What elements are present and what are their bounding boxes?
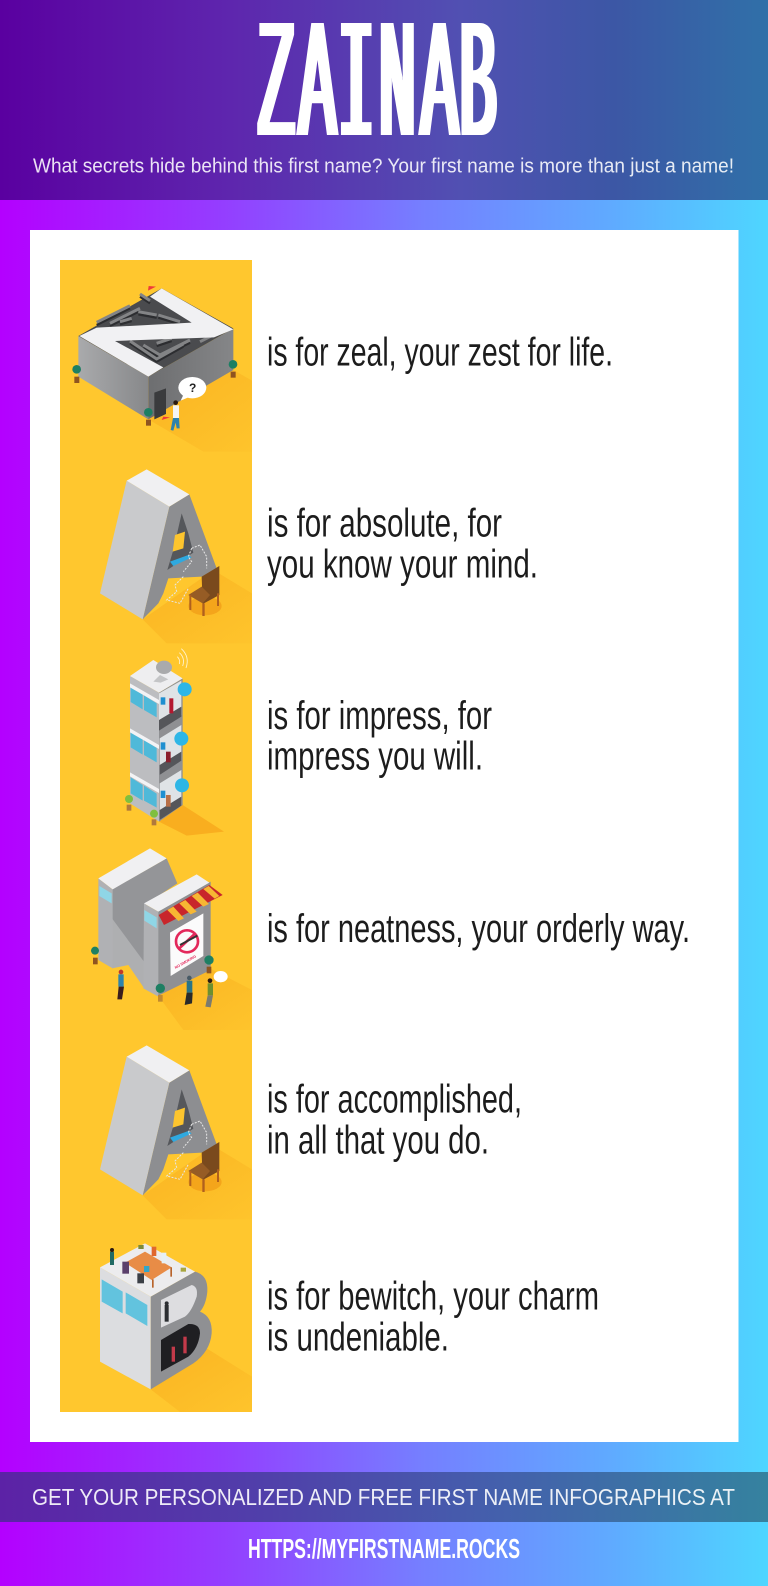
text: A line xyxy=(267,502,538,586)
title: ZAINAB xyxy=(258,0,496,187)
rooftop people xyxy=(110,1245,186,1283)
text: I line xyxy=(267,694,492,778)
speech bubble: ? xyxy=(189,381,196,395)
subtitle: What secrets hide behind this first name? Your first name is more than just a name! xyxy=(33,156,734,178)
illustration: B rooftop building xyxy=(100,1243,252,1412)
text: B line: is undeniable. xyxy=(267,1316,449,1360)
text: B line xyxy=(267,1274,599,1360)
main white panel xyxy=(30,230,738,1442)
footer band xyxy=(0,1472,768,1522)
text: A line: is for absolute, for xyxy=(267,502,502,546)
text: Z line: is for zeal, your zest for life. xyxy=(267,330,613,374)
person xyxy=(171,400,180,431)
text: A line: you know your mind. xyxy=(267,542,538,586)
text: I line: is for impress, for xyxy=(267,694,492,738)
illustration: I office tower xyxy=(125,649,224,836)
text: A second line xyxy=(267,1078,522,1162)
illustration: A building xyxy=(100,469,252,643)
text: B line: is for bewitch, your charm xyxy=(267,1274,599,1318)
illustration: Z maze building xyxy=(72,286,252,452)
text: A second line: in all that you do. xyxy=(267,1118,489,1162)
illustration: A building repeat xyxy=(100,1045,252,1219)
yellow illustration column xyxy=(60,260,252,1412)
people xyxy=(117,970,228,1007)
footer url: HTTPS://MYFIRSTNAME.ROCKS xyxy=(248,1533,520,1564)
no smoking sign: NO SMOKING xyxy=(174,954,197,970)
satellite dish xyxy=(153,649,187,683)
text: A second line: is for accomplished, xyxy=(267,1078,522,1122)
header band xyxy=(0,0,768,200)
illustration: N shop building xyxy=(91,848,252,1030)
speech bubble xyxy=(178,377,206,401)
text: I line: impress you will. xyxy=(267,734,483,778)
no smoking sign xyxy=(170,913,203,976)
